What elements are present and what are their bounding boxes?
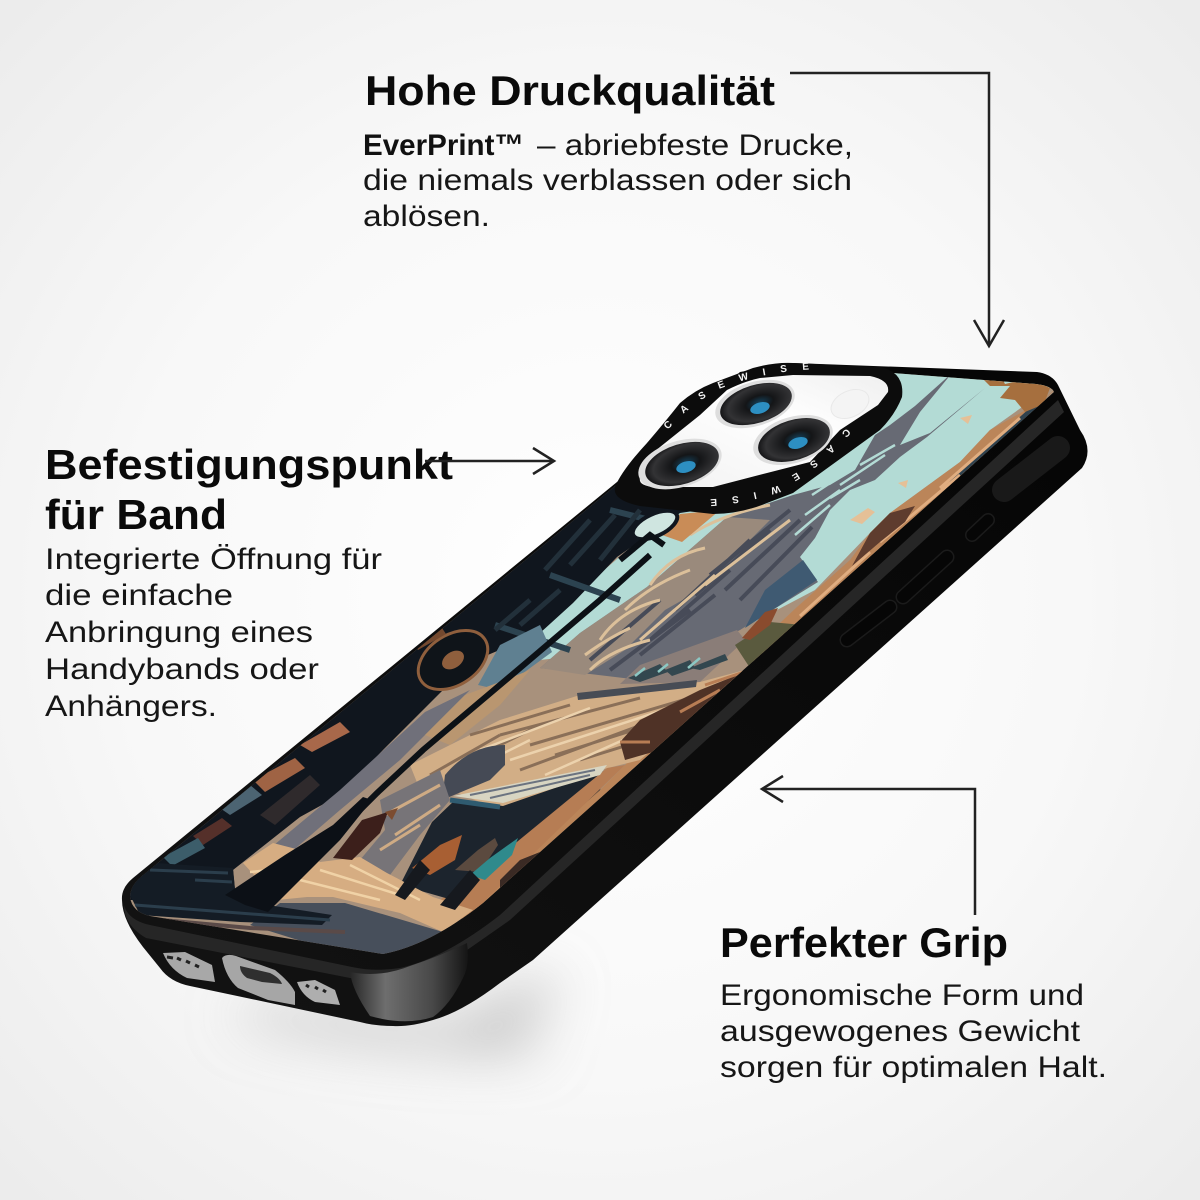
left dark buildings [130, 470, 720, 900]
body text: Anhängers. [45, 690, 217, 723]
camera glass [640, 375, 888, 487]
side buttons [847, 448, 1058, 640]
body text: Integrierte Öffnung für [45, 543, 382, 576]
body text [363, 129, 853, 233]
slate blue wall [478, 625, 552, 690]
phone drop shadow [229, 965, 568, 1067]
infographic canvas [45, 72, 1104, 1083]
cathedral [540, 373, 985, 680]
body text: Ergonomische Form und [720, 979, 1084, 1012]
lens right [747, 406, 839, 474]
lamp arm [620, 535, 664, 560]
bottom right speaker [297, 980, 340, 1005]
flash [826, 384, 874, 424]
heading: Befestigungspunkt [45, 441, 453, 488]
lens left [632, 429, 728, 499]
body text: EverPrint™ [363, 129, 524, 162]
tan facade [410, 670, 745, 810]
body text [45, 543, 382, 723]
phone case [122, 362, 1088, 1026]
callout: Perfekter Grip [720, 919, 1107, 1084]
grey pavement [276, 690, 470, 849]
clouds [850, 415, 972, 524]
lens top [709, 371, 801, 437]
heading: Hohe Druckqualität [365, 67, 775, 114]
case rim highlight [124, 400, 1064, 981]
body text: ausgewogenes Gewicht [720, 1015, 1081, 1048]
ring branding top: CASEWISE [664, 363, 809, 428]
heading [45, 441, 453, 538]
heading: für Band [45, 491, 227, 538]
medallion [416, 629, 490, 691]
body text: die einfache [45, 579, 233, 612]
striped awning [450, 765, 607, 807]
tan roof [425, 670, 530, 745]
body text [720, 979, 1107, 1084]
cathedral tan left part [540, 517, 770, 675]
printed artwork [130, 373, 1054, 954]
heading: Perfekter Grip [720, 919, 1008, 966]
road [250, 903, 443, 958]
camera ring [615, 363, 902, 514]
street texture [250, 865, 420, 900]
sunlit street [243, 843, 473, 932]
ring branding bottom: CASEWISE [710, 430, 850, 506]
gloss corner [350, 943, 468, 1021]
pedestrians [395, 835, 545, 910]
arrow: to lanyard point [425, 448, 554, 474]
slate wall [745, 560, 817, 628]
body text: sorgen für optimalen Halt. [720, 1051, 1107, 1084]
brown foreground building [620, 675, 738, 760]
autumn leaves [984, 380, 1050, 412]
right side buildings [440, 385, 1060, 925]
central figure and shadow [225, 797, 398, 912]
body text: – abriebfeste Drucke, [537, 129, 853, 162]
planter [735, 622, 794, 666]
callout: Befestigungspunkt für Band [45, 441, 453, 723]
camera surround [614, 362, 902, 514]
orange side walk [461, 765, 625, 914]
case body [122, 363, 1088, 1026]
stepped dark foreground [130, 862, 345, 932]
slate roof with windows [577, 630, 745, 700]
USB-C port [222, 955, 295, 1005]
body text: die niemals verblassen oder sich [363, 164, 852, 197]
black lamp post [355, 555, 650, 815]
art base [130, 373, 1054, 954]
body text: Anbringung eines [45, 616, 313, 649]
bottom left speaker [163, 952, 215, 982]
body text: ablösen. [363, 200, 490, 233]
arrow: to print surface [790, 73, 1004, 346]
grey tan streaks before street [360, 770, 450, 875]
arrow: to grip side [762, 776, 975, 915]
body text: Handybands oder [45, 653, 319, 686]
sky [540, 360, 1060, 660]
callout: Hohe Druckqualität [363, 67, 853, 233]
dark area under awning [400, 770, 607, 905]
